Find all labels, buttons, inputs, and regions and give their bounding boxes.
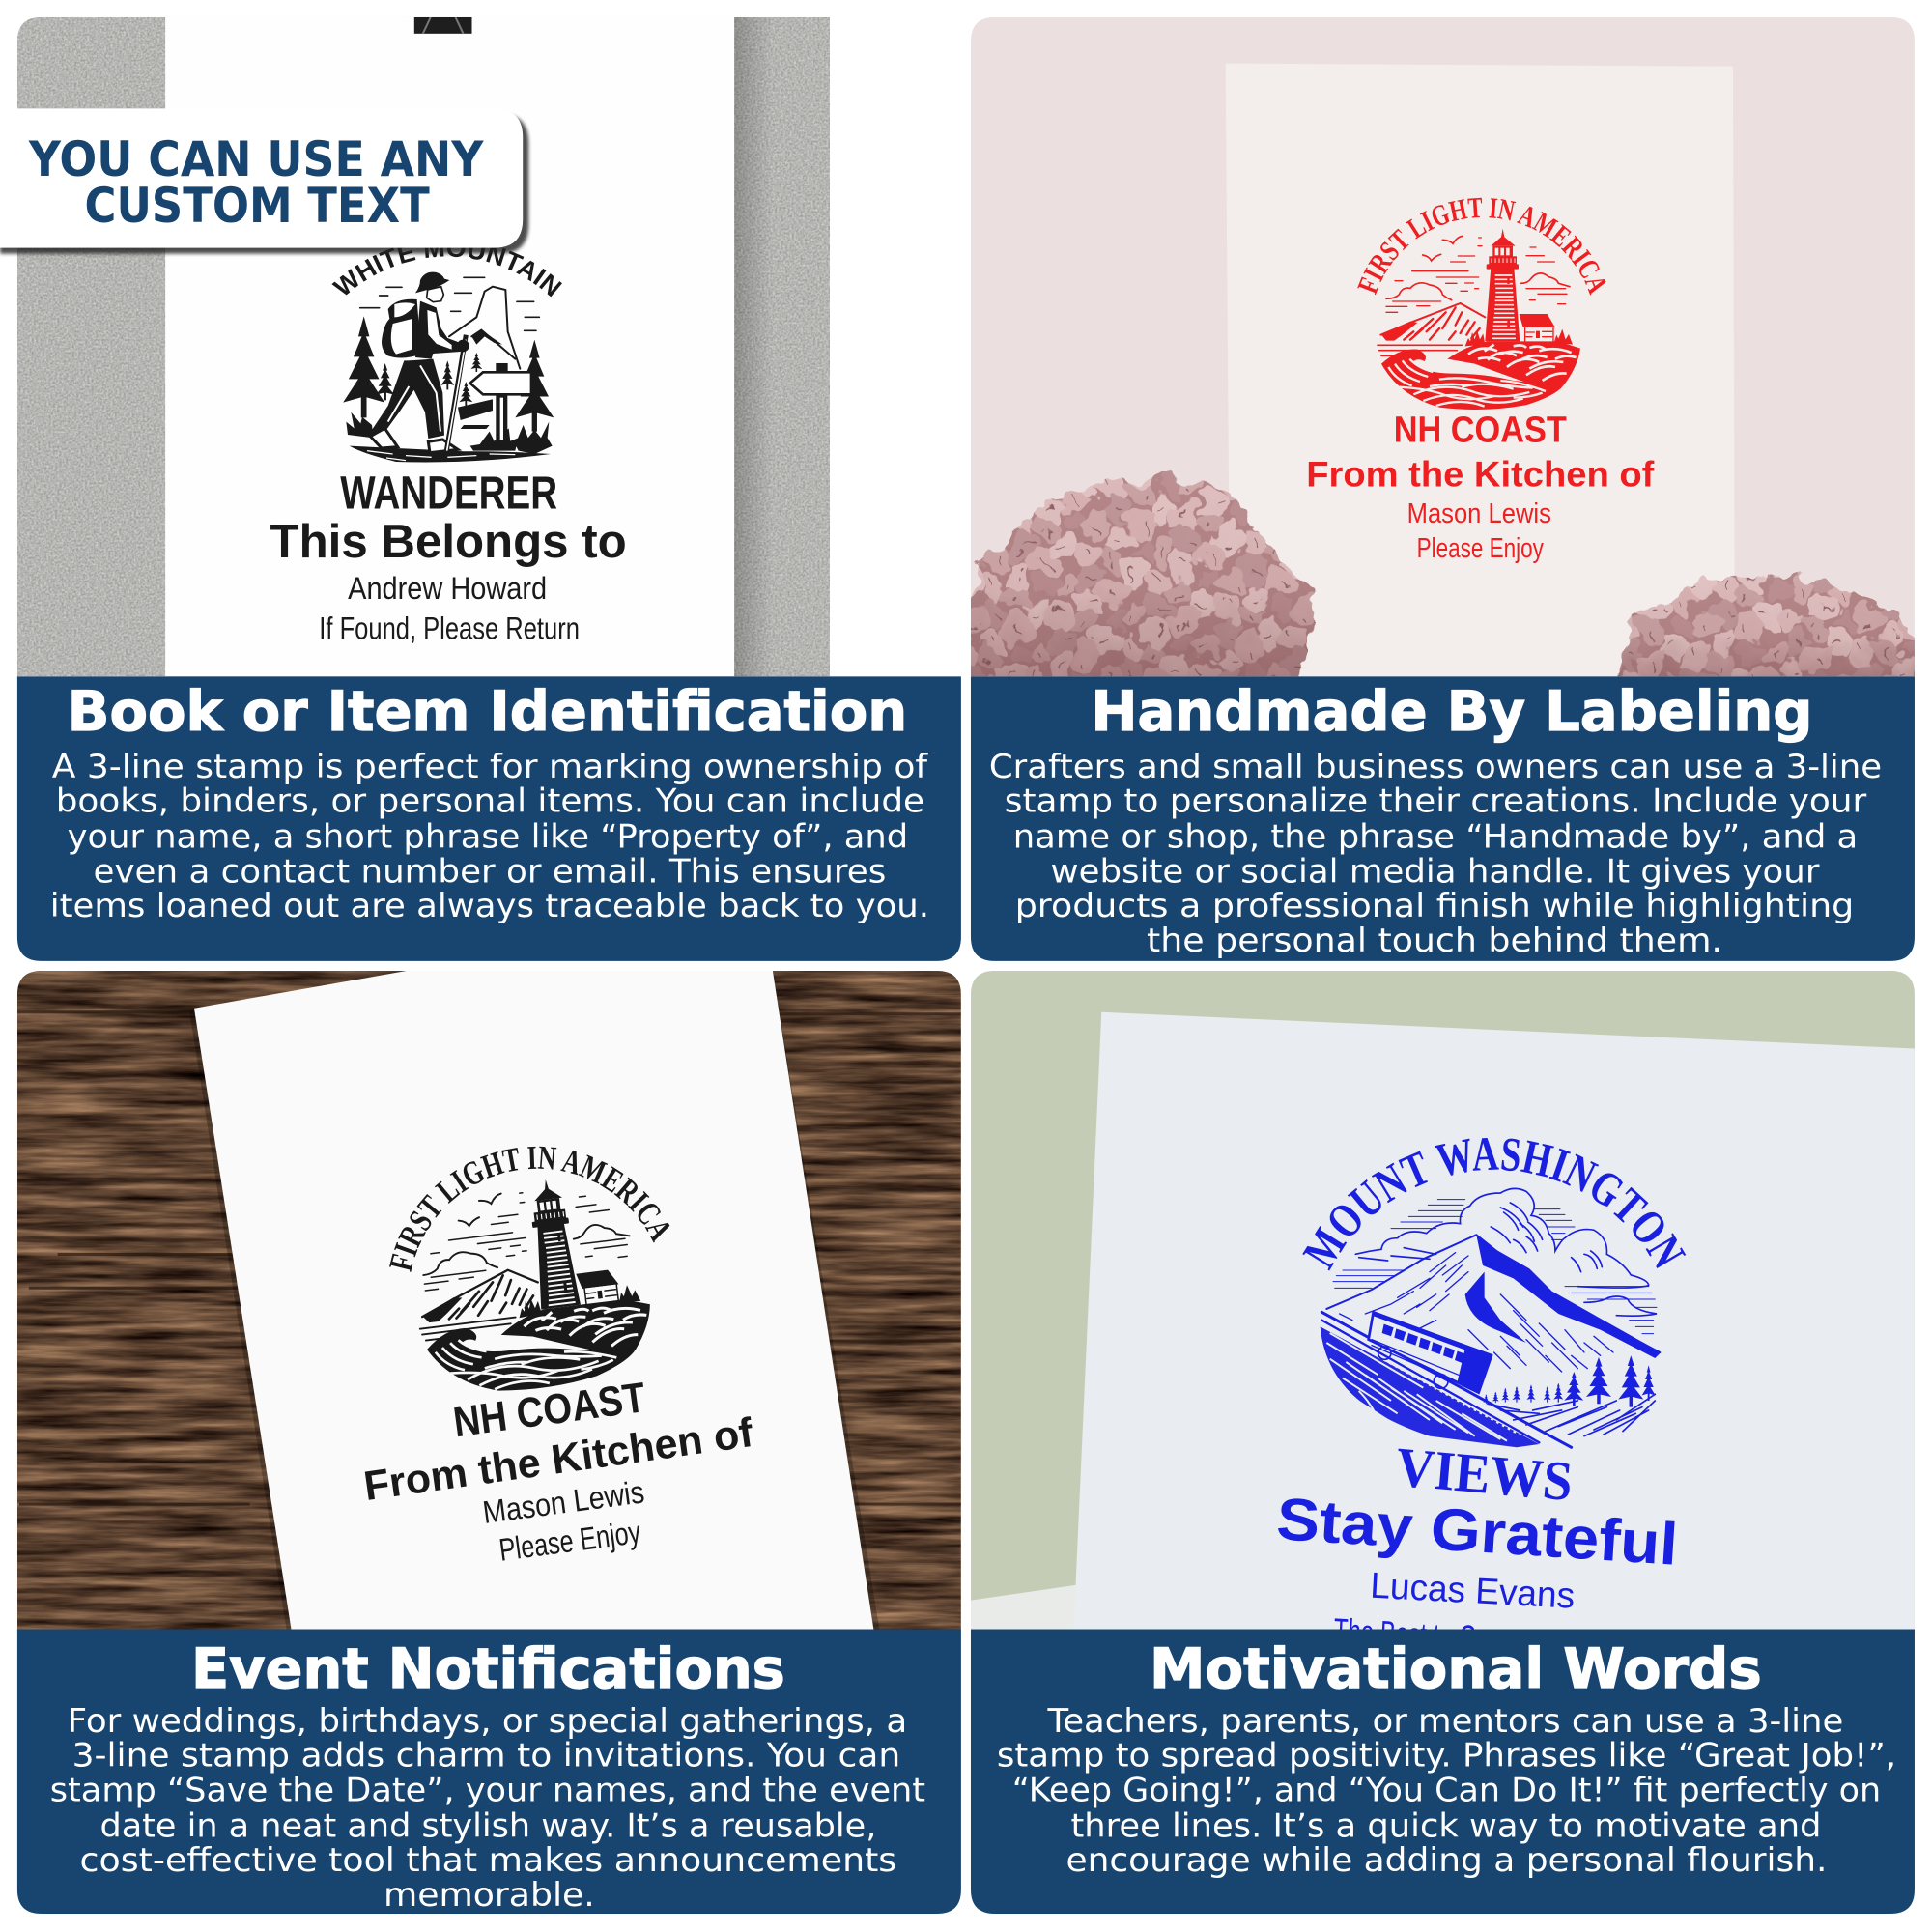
caption body: date in a neat and stylish way. It’s a reusable,	[99, 1806, 876, 1844]
caption box	[971, 1629, 1915, 1914]
caption heading: Motivational Words	[1150, 1637, 1762, 1701]
caption body: “Keep Going!”, and “You Can Do It!” fit perfectly on	[1012, 1772, 1881, 1809]
stamp text: NH COAST: NH COAST	[450, 1374, 648, 1446]
stamp arc text: MOUNT WASHINGTON	[1302, 1138, 1687, 1271]
stamp: black lighthouse	[389, 1146, 670, 1391]
caption body: products a professional finish while highlighting	[1015, 887, 1854, 924]
caption body: even a contact number or email. This ensures	[94, 852, 886, 890]
caption body: memorable.	[384, 1876, 595, 1914]
stamp arc text: FIRST LIGHT IN AMERICA	[1357, 197, 1605, 296]
panel: book or item identification	[17, 17, 961, 961]
callout: you can use any custom text	[0, 108, 528, 254]
stamp text: NH COAST: NH COAST	[1394, 411, 1567, 451]
railway	[1321, 1312, 1572, 1447]
stamp text: Lucas Evans: Lucas Evans	[1369, 1566, 1576, 1617]
stamp text: Mason Lewis: Mason Lewis	[1407, 498, 1551, 529]
photo: paper on concrete with white stamp sheet	[17, 17, 830, 676]
stamp text: Please Enjoy: Please Enjoy	[497, 1514, 643, 1568]
hydrangea right	[1617, 571, 1915, 676]
callout: you can use any custom text: CUSTOM TEXT	[85, 178, 430, 234]
trees	[1586, 1357, 1611, 1404]
photo: paper on sage background	[971, 971, 1915, 1660]
caption body: books, binders, or personal items. You can include	[56, 782, 924, 820]
train car	[1369, 1311, 1492, 1393]
stamp text: Stay Grateful: Stay Grateful	[1274, 1486, 1680, 1578]
caption body: stamp to personalize their creations. Include your	[1005, 782, 1866, 820]
caption heading: Book or Item Identification	[68, 680, 907, 744]
stamp arc text: WHITE MOUNTAIN	[332, 247, 562, 298]
caption body: encourage while adding a personal flourish.	[1065, 1841, 1827, 1879]
hydrangea left	[971, 470, 1316, 676]
photo: tilted paper on dark wood	[17, 971, 961, 1629]
caption body: name or shop, the phrase “Handmade by”, and a	[1013, 818, 1858, 856]
caption body: 3-line stamp adds charm to invitations. You can	[72, 1737, 900, 1775]
caption body: the personal touch behind them.	[1147, 922, 1722, 959]
caption body: Teachers, parents, or mentors can use a 3-line	[1047, 1702, 1843, 1740]
foreground hatching	[1488, 1394, 1655, 1436]
panel: handmade by labeling	[970, 17, 1915, 961]
caption body	[997, 1702, 1896, 1879]
caption body: cost-effective tool that makes announcements	[80, 1841, 896, 1879]
stamp text: Please Enjoy: Please Enjoy	[1417, 533, 1544, 564]
caption body: stamp to spread positivity. Phrases like “Great Job!”,	[997, 1737, 1896, 1775]
caption body: Crafters and small business owners can use a 3-line	[989, 748, 1882, 785]
caption body: your name, a short phrase like “Property of”, and	[68, 818, 908, 856]
stamp text block	[270, 468, 627, 646]
caption body: For weddings, birthdays, or special gatherings, a	[68, 1702, 907, 1740]
panel: event notifications	[17, 971, 961, 1914]
stamp text: This Belongs to: This Belongs to	[270, 516, 627, 568]
caption body: website or social media handle. It gives your	[1051, 852, 1820, 890]
stamp text: Andrew Howard: Andrew Howard	[348, 570, 547, 606]
stamp: red lighthouse	[1357, 197, 1605, 410]
signpost	[470, 363, 531, 442]
stamp text: WANDERER: WANDERER	[340, 468, 557, 519]
caption body: items loaned out are always traceable back to you.	[50, 887, 929, 924]
panel: motivational words	[970, 971, 1915, 1914]
caption body	[50, 748, 929, 924]
stamp text block	[1274, 1436, 1680, 1617]
stamp: hiker illustration	[332, 220, 562, 462]
stamp text: From the Kitchen of: From the Kitchen of	[1306, 454, 1655, 494]
caption body: stamp “Save the Date”, your names, and the event	[50, 1772, 925, 1809]
caption body	[989, 748, 1882, 959]
stamp: blue mountain railway	[1302, 1138, 1687, 1449]
caption heading: Handmade By Labeling	[1091, 680, 1813, 744]
caption heading: Event Notifications	[191, 1637, 785, 1701]
hiker figure	[369, 272, 469, 455]
stamp arc text: FIRST LIGHT IN AMERICA	[389, 1146, 670, 1272]
caption body: three lines. It’s a quick way to motivate and	[1070, 1806, 1821, 1844]
mountain	[1326, 1235, 1660, 1352]
clouds	[1355, 1188, 1657, 1316]
caption box	[971, 676, 1915, 961]
callout: you can use any custom text: YOU CAN USE ANY	[28, 131, 484, 187]
stamp text: From the Kitchen of: From the Kitchen of	[361, 1409, 756, 1510]
caption box	[17, 676, 961, 961]
stamp text block	[1306, 411, 1655, 564]
sky hatching	[1333, 1200, 1657, 1334]
photo: linen card with hydrangeas	[956, 17, 1927, 701]
stamp text: Mason Lewis: Mason Lewis	[481, 1473, 646, 1530]
stamp text block	[361, 1374, 756, 1568]
caption body	[50, 1702, 925, 1914]
stamp text: VIEWS: VIEWS	[1394, 1436, 1575, 1513]
clipped stamp line: The Best to Come	[1333, 1611, 1521, 1660]
caption body: A 3-line stamp is perfect for marking ownership of	[52, 748, 928, 785]
caption box	[17, 1629, 961, 1914]
stamp text: If Found: If Found, Please Return	[319, 611, 580, 646]
